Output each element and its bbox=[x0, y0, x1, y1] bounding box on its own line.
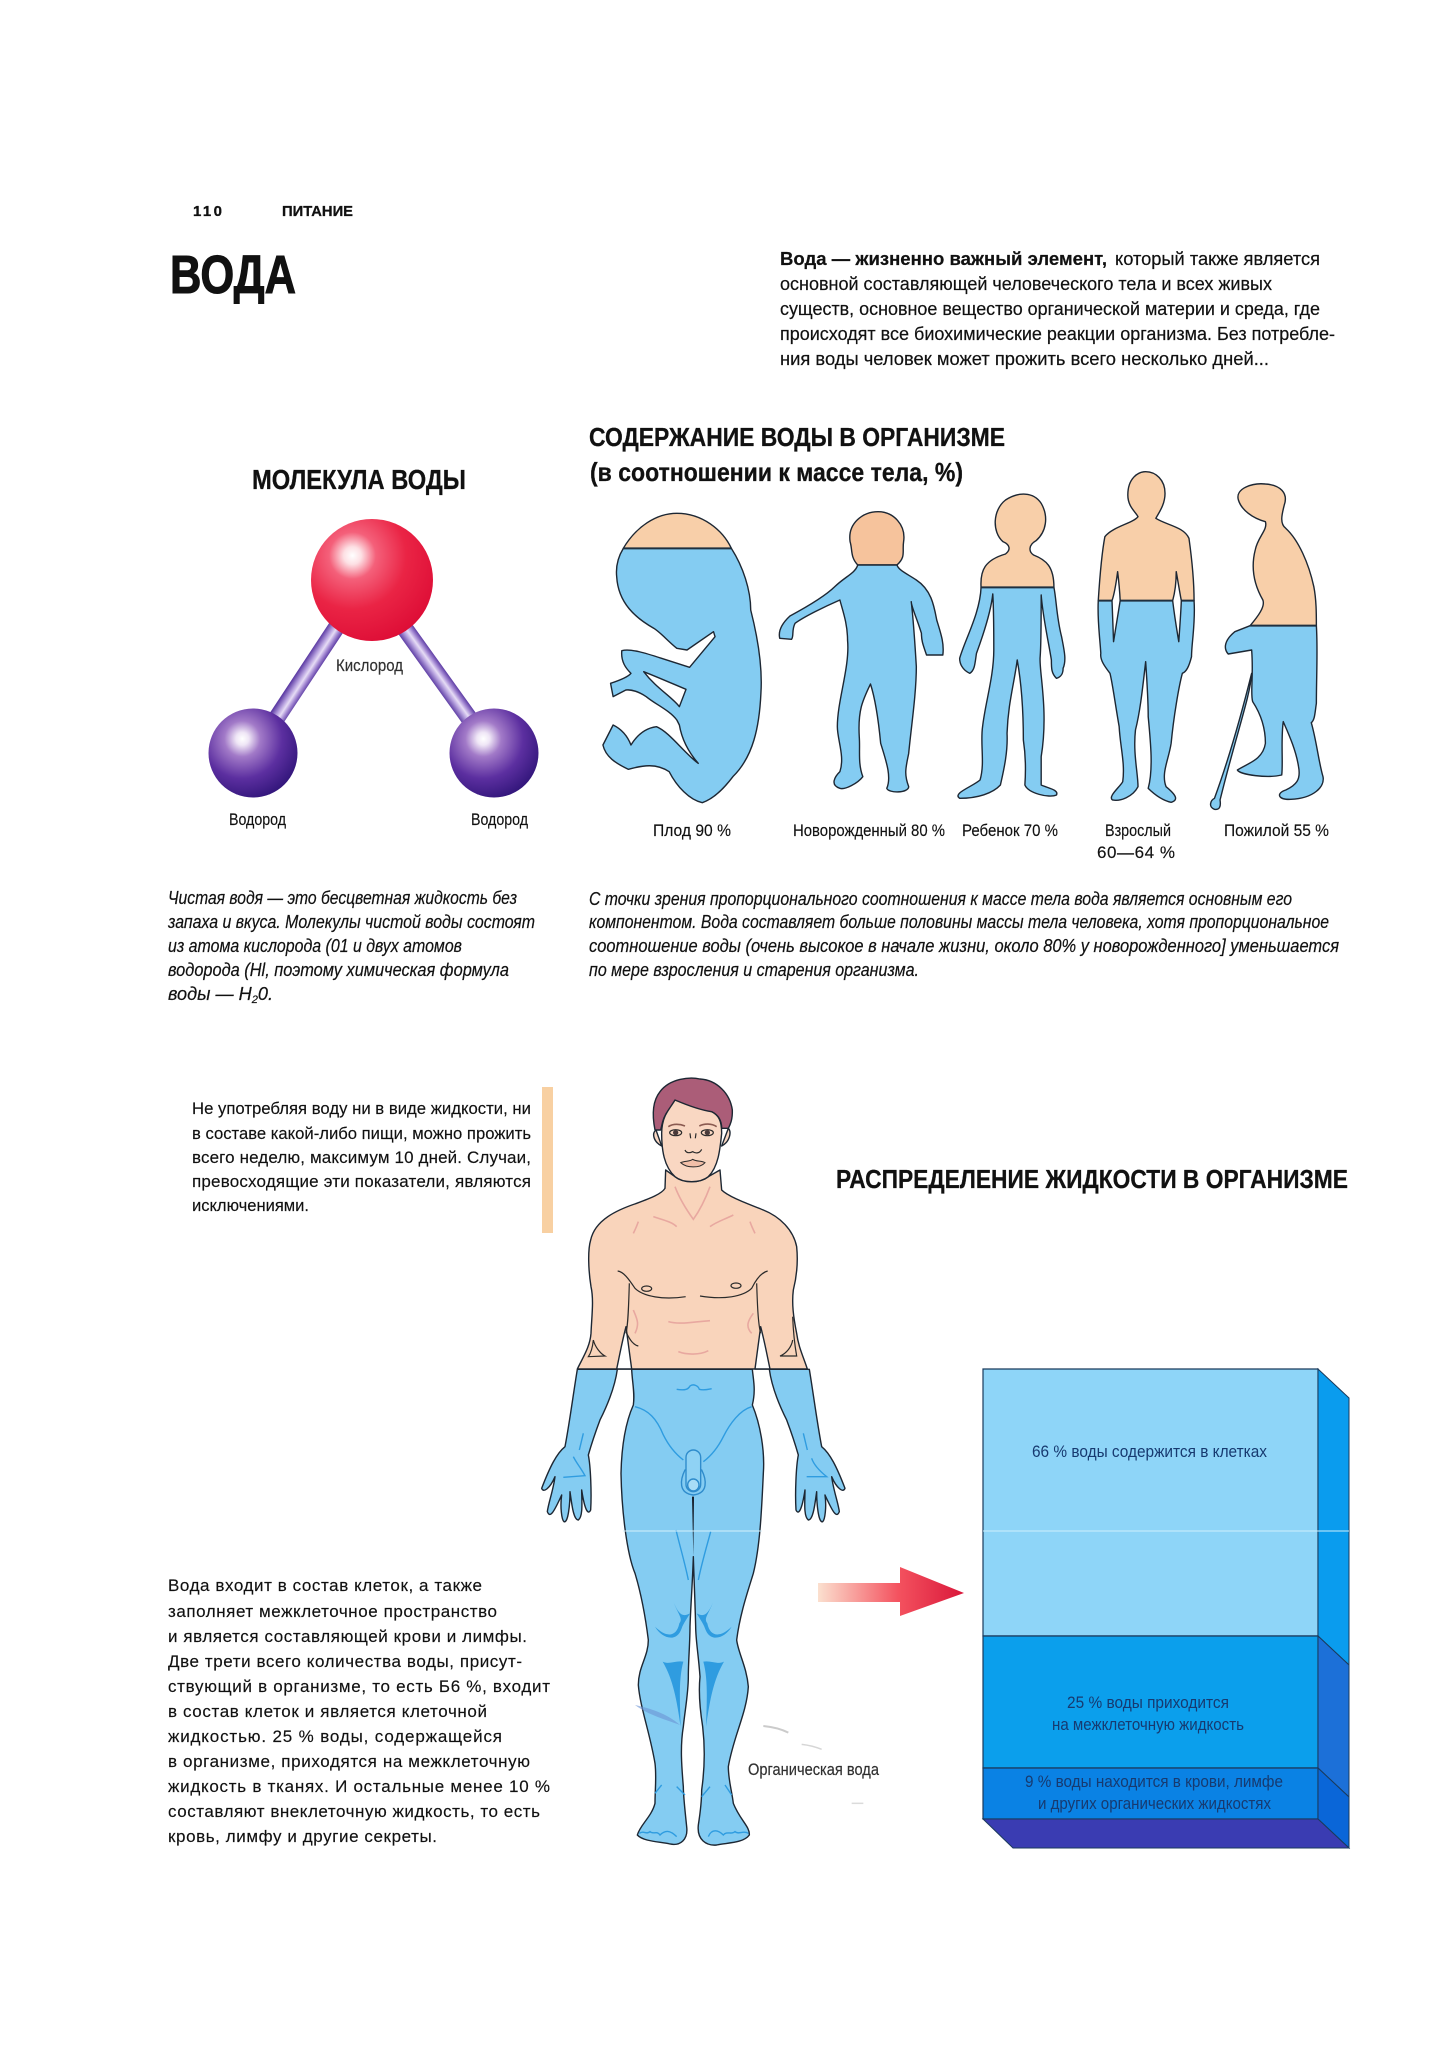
text block: pure water bbox=[167, 888, 535, 1006]
heading: water content: (в соотношении к массе тела, %) bbox=[590, 457, 963, 487]
title: ВОДА bbox=[170, 245, 296, 305]
text block: proportion of water: компонентом. Вода составляет больше половины массы тела человека, хотя пропорциональное bbox=[589, 912, 1329, 932]
bond: left bbox=[272, 622, 340, 725]
hydrogen atom left bbox=[208, 708, 298, 798]
label: oxygen: Кислород bbox=[336, 656, 403, 675]
fluid distribution 3D block bbox=[983, 1369, 1349, 1848]
page number: 110 bbox=[193, 203, 222, 220]
label: fetus: Плод 90 % bbox=[653, 821, 731, 840]
label: adult: 60—64 % bbox=[1097, 843, 1175, 862]
intro text block: происходят все биохимические реакции организма. Без потребле- bbox=[780, 324, 1335, 344]
text block: survival without water: Не употребляя воду ни в виде жидкости, ни bbox=[192, 1099, 531, 1118]
human body figure bbox=[542, 1078, 863, 1845]
text block: pure water: воды — H bbox=[168, 984, 251, 1004]
body: lower part with water bbox=[542, 1369, 863, 1845]
intro text block: Вода — жизненно важный элемент, bbox=[780, 249, 1107, 269]
label: adult: Взрослый bbox=[1105, 821, 1171, 840]
segment: blood and lymph 9%: 9 % воды находится в крови, лимфе bbox=[1025, 1772, 1283, 1791]
intro text block: ния воды человек может прожить всего несколько дней... bbox=[780, 349, 1269, 369]
bond: right bbox=[403, 626, 474, 725]
water molecule diagram bbox=[208, 519, 538, 829]
text block: survival without water: исключениями. bbox=[192, 1196, 309, 1215]
text block: water in cells: заполняет межклеточное пространство bbox=[168, 1602, 497, 1621]
text block: water in cells: жидкость в тканях. И остальные менее 10 % bbox=[168, 1777, 550, 1796]
silhouettes: water content by age bbox=[603, 472, 1329, 862]
text block: pure water: запаха и вкуса. Молекулы чистой воды состоят bbox=[167, 912, 535, 932]
intro text block bbox=[780, 249, 1335, 369]
segment: blood and lymph 9%: и других органических жидкостях bbox=[1038, 1794, 1271, 1813]
label: hydrogen right: Водород bbox=[471, 810, 528, 829]
text block: water in cells: ствующий в организме, то есть Б6 %, входит bbox=[168, 1677, 550, 1696]
intro text block: который также является bbox=[1115, 249, 1320, 269]
figure: child bbox=[958, 494, 1065, 798]
text block: water in cells: Две трети всего количества воды, присут- bbox=[168, 1652, 522, 1671]
body: upper part without water bbox=[577, 1078, 807, 1369]
heading: water content bbox=[589, 422, 1005, 487]
section label: ПИТАНИЕ bbox=[282, 203, 353, 220]
text block: survival without water: превосходящие эти показатели, являются bbox=[192, 1172, 531, 1191]
heading: water molecule: МОЛЕКУЛА ВОДЫ bbox=[252, 464, 466, 495]
segment: intercellular 25%: 25 % воды приходится bbox=[1067, 1693, 1229, 1712]
figure: newborn bbox=[779, 512, 943, 792]
text block: water in cells: и является составляющей крови и лимфы. bbox=[168, 1627, 527, 1646]
segment: intercellular 25% bbox=[983, 1636, 1349, 1797]
segment: blood and lymph 9% bbox=[983, 1768, 1349, 1848]
label: organic water: Органическая вода bbox=[748, 1760, 879, 1779]
segment: cells 66% bbox=[983, 1369, 1349, 1665]
text block: water in cells bbox=[168, 1576, 550, 1846]
accent bar bbox=[542, 1087, 553, 1233]
text block: proportion of water bbox=[589, 889, 1339, 980]
label: hydrogen left: Водород bbox=[229, 810, 286, 829]
text block: pure water: Чистая водя — это бесцветная жидкость без bbox=[168, 888, 517, 908]
text block: water in cells: в организме, приходятся на межклеточную bbox=[168, 1752, 530, 1771]
arrow bbox=[818, 1567, 964, 1616]
text block: water in cells: кровь, лимфу и другие секреты. bbox=[168, 1827, 437, 1846]
text block: water in cells: жидкостью. 25 % воды, содержащейся bbox=[168, 1727, 502, 1746]
label: newborn: Новорожденный 80 % bbox=[793, 821, 945, 840]
heading: fluid distribution: РАСПРЕДЕЛЕНИЕ ЖИДКОСТИ В ОРГАНИЗМЕ bbox=[836, 1164, 1348, 1194]
heading: water content: СОДЕРЖАНИЕ ВОДЫ В ОРГАНИЗМЕ bbox=[589, 422, 1005, 452]
text block: proportion of water: по мере взросления и старения организма. bbox=[589, 960, 919, 980]
text block: proportion of water: соотношение воды (очень высокое в начале жизни, около 80% у новорожденного] уменьшается bbox=[589, 936, 1339, 956]
figure: adult bbox=[1098, 472, 1194, 802]
text block: survival without water: всего неделю, максимум 10 дней. Случаи, bbox=[192, 1148, 531, 1167]
label: adult bbox=[1097, 821, 1175, 862]
oxygen atom bbox=[311, 519, 433, 641]
text block: proportion of water: С точки зрения пропорционального соотношения к массе тела вода является основным его bbox=[589, 889, 1292, 909]
text block: water in cells: Вода входит в состав клеток, а также bbox=[168, 1576, 482, 1595]
text block: pure water: из атома кислорода (01 и двух атомов bbox=[168, 936, 462, 956]
text block: pure water: 2 bbox=[251, 994, 258, 1006]
text block: pure water: водорода (Hl, поэтому химическая формула bbox=[168, 960, 509, 980]
label: child: Ребенок 70 % bbox=[962, 821, 1058, 840]
text block: survival without water bbox=[192, 1099, 531, 1215]
segment: intercellular 25%: на межклеточную жидкость bbox=[1052, 1715, 1244, 1734]
figure: fetus bbox=[603, 513, 761, 803]
hydrogen atom right bbox=[450, 708, 538, 798]
segment: cells 66%: 66 % воды содержится в клетках bbox=[1032, 1442, 1267, 1461]
intro text block: существ, основное вещество органической материи и среда, где bbox=[780, 299, 1320, 319]
text block: pure water: 0. bbox=[258, 984, 273, 1004]
figure: elderly bbox=[1211, 484, 1323, 809]
text block: survival without water: в составе какой-либо пищи, можно прожить bbox=[192, 1124, 531, 1143]
text block: water in cells: составляют внеклеточную жидкость, то есть bbox=[168, 1802, 540, 1821]
text block: water in cells: в состав клеток и является клеточной bbox=[168, 1702, 487, 1721]
label: elderly: Пожилой 55 % bbox=[1224, 821, 1329, 840]
intro text block: основной составляющей человеческого тела и всех живых bbox=[780, 274, 1272, 294]
